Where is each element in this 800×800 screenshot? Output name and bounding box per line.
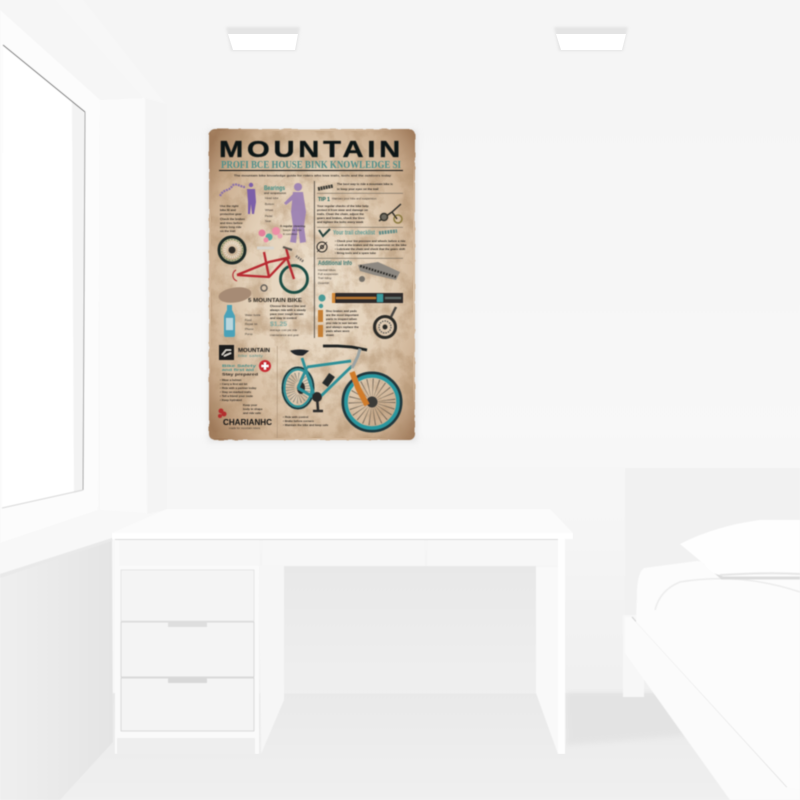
text: safety heading — [222, 363, 259, 376]
bed — [566, 468, 800, 800]
text: additives list: Downhill — [318, 281, 329, 285]
text: bearings list — [264, 191, 286, 223]
text: small note: and ride safe — [243, 411, 261, 415]
ceiling light left — [226, 27, 300, 51]
icon: small purple rider — [247, 183, 256, 214]
text: bearings list: Wheel — [265, 208, 274, 212]
pedal — [261, 285, 267, 291]
fork — [352, 372, 367, 405]
left cabinet — [115, 540, 260, 754]
logo: mountain badge — [219, 345, 234, 360]
window bottom seal — [2, 490, 83, 508]
text: tip paragraph: gears and brakes, check the tires — [317, 216, 365, 220]
text: hydration list — [245, 313, 261, 336]
text: bearings list: Bottom — [265, 202, 275, 206]
text: flower caption: keeps the bike — [283, 228, 302, 232]
text: safety bullets: • Carry a first aid kit — [220, 382, 247, 386]
headboard — [625, 468, 800, 628]
heading: additives: Additional Info — [318, 261, 352, 267]
text: brake note: down — [326, 333, 334, 337]
ceiling light right — [554, 27, 628, 51]
pillow shadow — [704, 562, 800, 578]
drawer 1 — [121, 570, 254, 621]
desk edge shadow — [115, 539, 559, 540]
side wall reveal — [100, 98, 147, 514]
text: tip paragraph: and tighten the bolts every week — [317, 220, 364, 224]
text: tips paragraph — [270, 304, 306, 320]
text: brake note: Disc brakes and pads — [326, 309, 357, 313]
heading: 5 mountain tips: 5 MOUNTAIN BIKE — [248, 298, 303, 304]
window right seal — [83, 112, 85, 490]
text: safety bullets: • Ride with a partner today — [220, 386, 257, 390]
text: safety notes: Use the right — [220, 204, 238, 208]
text: hydration list: Water bottle — [245, 313, 261, 317]
back wall — [167, 106, 800, 696]
text: price note: average cost per ride — [270, 328, 298, 332]
text: tip paragraph — [317, 204, 369, 224]
text: bearings list: Pedal — [265, 214, 273, 218]
poster shadow — [208, 130, 417, 442]
text: safety bullets: • Wear a helmet — [220, 378, 241, 382]
frame — [298, 358, 352, 398]
text: bullets: • Lubricate the chain and check that the gears shift — [335, 247, 405, 251]
icon: purple chain — [220, 184, 245, 196]
text: tip paragraph: protect it from wear and damage on — [317, 208, 368, 212]
window sill — [0, 510, 147, 574]
desk front edge — [112, 533, 573, 539]
text: safety notes: and tires before — [220, 221, 243, 225]
text: additives list: Full suspension — [318, 272, 338, 276]
text: intro note — [337, 182, 393, 191]
icon: detached wheel — [219, 237, 245, 263]
plinth — [117, 738, 255, 754]
icon: brake disc — [374, 307, 396, 338]
text: bullets: • Bring tools and a spare tube — [335, 251, 376, 255]
motor battery — [325, 375, 332, 385]
text: intro note: The best way to ride a mountain bike is — [337, 182, 393, 186]
text: bike bullets: • Maintain the bike and keep safe — [283, 423, 329, 427]
text: price note — [270, 328, 299, 337]
text: safety bullets: • Stay on marked trails — [220, 390, 251, 394]
handle 2 — [168, 622, 207, 627]
poster subtitle: PROFI BCE HOUSE BINK KNOWLEDGE SI — [221, 160, 401, 171]
text: safety heading: and first aid — [222, 367, 255, 372]
text: flower caption — [280, 224, 305, 236]
left cabinet side — [259, 566, 284, 754]
divider rule — [317, 257, 403, 260]
left wall soffit — [0, 0, 143, 100]
window top seal — [3, 45, 85, 112]
brake parts — [296, 256, 304, 262]
text: intro note: to keep your eyes on the trail — [337, 187, 379, 191]
text: safety notes: Check the brakes — [220, 217, 245, 221]
brand tagline: made for mountain riders — [229, 426, 261, 430]
window frame — [0, 10, 100, 543]
brand logo: CHARIANHC — [223, 418, 272, 427]
text: tip paragraph: Your regular checks of the bike help — [317, 204, 369, 208]
text: brake note: are the most important — [326, 313, 359, 317]
heading: mountain badge: MOUNTAIN — [238, 348, 270, 354]
handle 3 — [168, 678, 207, 683]
text: flower caption: A regular cleaning — [280, 224, 305, 228]
text: safety notes: bike fit and — [220, 208, 236, 212]
illustration: rock — [218, 285, 252, 305]
desk top — [112, 509, 573, 533]
headboard leg — [623, 615, 644, 697]
rear wheel — [282, 368, 314, 408]
poster stains — [211, 131, 413, 438]
drawer 3 — [121, 678, 254, 731]
text: bullets: • Check your tire pressure and wheels before a ride — [335, 239, 406, 243]
handlebar — [283, 247, 292, 250]
text: additives list: Hardtail bikes — [318, 268, 336, 272]
icon: gear — [317, 242, 327, 252]
right leg side — [536, 567, 558, 754]
rail shadow line — [632, 617, 787, 787]
text: safety heading: Stay prepared — [222, 372, 259, 376]
window sill front edge — [0, 538, 112, 578]
text: brake note: you ride in wet terrain — [326, 321, 357, 325]
lower left wall — [0, 538, 113, 800]
price figure: $1.25 — [270, 322, 288, 328]
icon: chain blob — [379, 231, 397, 233]
text: safety notes: every long ride — [220, 225, 242, 229]
icon: large purple rider — [284, 183, 306, 243]
text: small note: Keep your — [243, 403, 258, 407]
divider rule — [317, 226, 403, 229]
text: hydration list: Food — [245, 318, 252, 322]
heading: tip one: TIP 1 — [318, 197, 330, 203]
divider rule — [317, 192, 403, 195]
desk — [112, 509, 573, 754]
duvet edge — [655, 579, 800, 610]
icon: pink flowers — [258, 227, 282, 242]
text: badge subtitle: bike safety — [238, 354, 263, 358]
text: tips paragraph: always ride with a steady — [270, 308, 306, 312]
bed rail — [625, 617, 800, 800]
text: bike bullets: • Ride with control — [283, 415, 308, 419]
text: tip paragraph: trails. Clean the chain, adjust the — [317, 212, 364, 216]
text: bearings list: and suspension — [264, 191, 286, 195]
ceiling — [83, 0, 800, 106]
panel divider — [276, 346, 278, 438]
poster — [208, 129, 417, 442]
text: safety heading: Bike Safety — [222, 363, 257, 368]
illustration: tools — [379, 204, 402, 223]
text: brake note: and always replace the — [326, 325, 359, 329]
heading: teal section: Your trail checklist — [333, 230, 375, 236]
text: tips paragraph: and stay in control — [270, 316, 297, 320]
handlebar — [323, 346, 367, 368]
front wheel — [280, 266, 308, 292]
header rule — [219, 170, 403, 171]
bed floor shadow — [566, 693, 690, 745]
icon: teal parts — [318, 294, 326, 308]
icon: dark chain — [318, 186, 333, 189]
icon: water bottle — [224, 305, 235, 337]
text: flower caption: in condition — [283, 232, 298, 236]
poster contents — [218, 136, 407, 438]
top drawer panel — [119, 540, 260, 566]
text: hydration list: Pump — [245, 332, 253, 336]
rear hub arc — [233, 270, 237, 281]
illustration: bike parts sketch — [358, 262, 400, 282]
text: safety bullets: • Keep hydrated — [220, 398, 242, 402]
icon: first aid — [259, 360, 271, 372]
chart: dark progress bar — [332, 293, 403, 303]
text: safety bullets: • Tell a friend your route — [220, 394, 253, 398]
window — [0, 10, 147, 578]
right column intro — [318, 182, 393, 191]
middle drawer — [262, 540, 425, 566]
seat — [291, 350, 308, 355]
illustration: teal mountain bike — [282, 346, 401, 431]
text: bearings list: Head tube — [265, 196, 279, 200]
crank — [312, 392, 323, 411]
text: small note — [243, 403, 263, 415]
text: bullets: • Look at the brakes and the suspension on the bike — [335, 243, 407, 247]
heading: bearings: Bearings — [264, 186, 286, 192]
text: bike bullets — [283, 415, 329, 427]
right drawer — [427, 540, 558, 566]
icon: red flower — [218, 408, 226, 418]
space under desk — [284, 566, 536, 693]
intro line: The mountain bike knowledge guide for riders who love trails, tools and the outdoors today — [234, 174, 391, 178]
poster paper — [209, 129, 415, 440]
text: brake note: parts to inspect when — [326, 317, 357, 321]
text: safety notes: on the trail — [220, 229, 236, 233]
text: bike bullets: • Brake before corners — [283, 419, 314, 423]
text: tips paragraph: Choose the best line and — [270, 304, 306, 308]
poster title: MOUNTAIN — [219, 136, 404, 162]
text: additives list: Trail riding — [318, 276, 332, 280]
ceiling beam — [55, 0, 167, 106]
front wheel — [343, 373, 401, 431]
icon: wrench check — [319, 229, 330, 236]
drawer 2 — [121, 622, 254, 677]
frame — [237, 248, 294, 279]
text: small note: body in shape — [243, 407, 263, 411]
text: safety notes: protective gear — [220, 212, 242, 216]
mattress — [636, 561, 800, 790]
pillow crease — [720, 573, 800, 575]
text: bearings list: Seat — [265, 219, 271, 223]
alcove return — [145, 98, 167, 514]
right leg front — [558, 539, 565, 754]
column divider — [313, 181, 316, 338]
window glass — [2, 45, 85, 508]
text: brake note — [326, 309, 359, 337]
illustration: red bike — [233, 247, 308, 292]
text: price note: maintenance and gear — [270, 333, 299, 337]
seat — [257, 246, 274, 250]
text: hydration list: Repair kit — [245, 322, 257, 326]
text: bullets — [335, 239, 407, 255]
text: tip subtitle: Maintain your bike and suspension — [332, 196, 377, 200]
text: additives list — [318, 268, 338, 285]
text: tips paragraph: pace over rough terrain — [270, 312, 304, 316]
text: brake note: pads when worn — [326, 329, 350, 333]
floor — [60, 693, 800, 800]
text: safety notes — [220, 204, 245, 233]
pillow — [680, 520, 800, 575]
icon: orange blocks — [318, 310, 323, 337]
window inner frame shade — [72, 101, 84, 493]
text: safety bullets — [220, 378, 257, 402]
text: hydration list: Phone — [245, 327, 254, 331]
